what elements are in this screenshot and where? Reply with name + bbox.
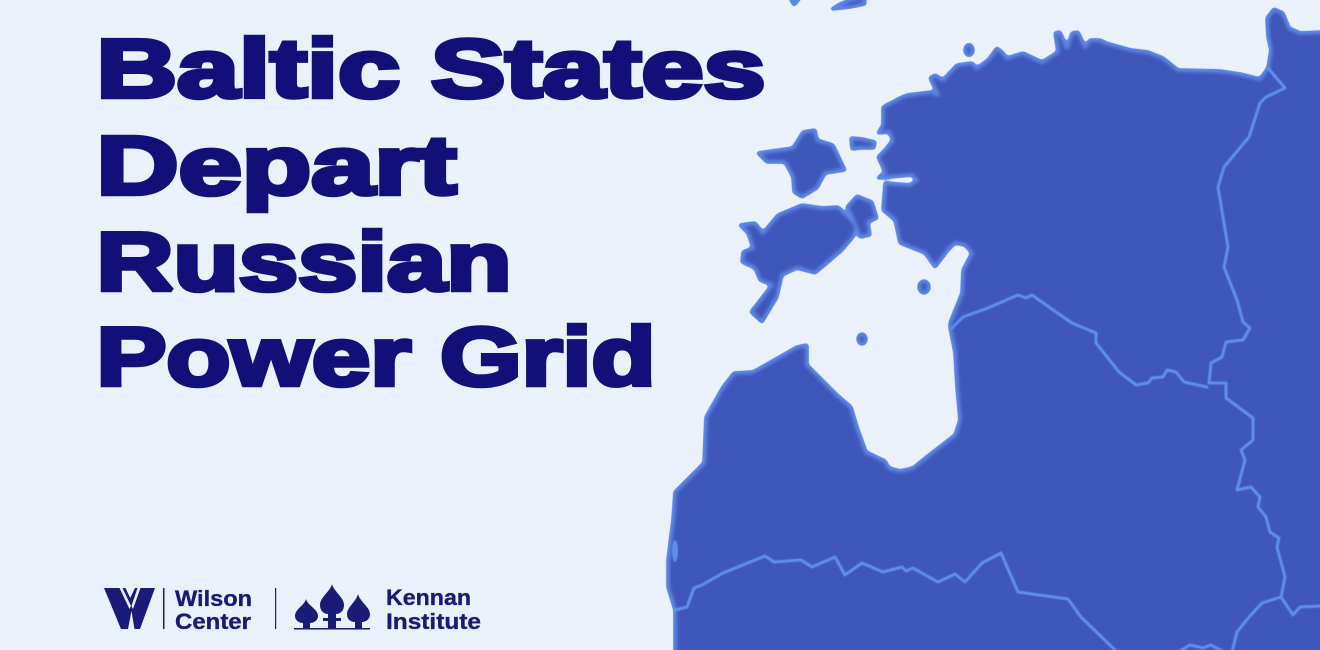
text: Wilson Center (175, 586, 252, 634)
border: southern fragment (1178, 645, 1224, 650)
map: coastal lagoon highlight (672, 540, 678, 562)
title line 4: Power Grid (96, 310, 656, 403)
map: national borders (675, 68, 1320, 650)
text: Kennan Institute: Institute (386, 609, 481, 634)
text: Wilson Center: Wilson (175, 586, 252, 611)
map: mainland Estonia, Latvia and neighbours (668, 9, 1320, 650)
map: land masses (668, 0, 1320, 650)
text: Kennan Institute (386, 585, 481, 634)
map: small island near Hiiumaa (851, 138, 875, 149)
divider: between organisations (275, 588, 276, 629)
border: Latvia–Lithuania (675, 553, 1117, 650)
text: Kennan Institute: Kennan (386, 585, 471, 610)
border: Lithuania–Belarus (1232, 597, 1281, 650)
title line 3: Russian (96, 215, 512, 308)
map: tiny islets (858, 44, 973, 344)
border: Estonia–Latvia (952, 295, 1207, 387)
text: Wilson Center: Center (175, 609, 251, 634)
title line 2: Depart (96, 119, 456, 212)
map: Baltic states (668, 0, 1320, 650)
title line 1: Baltic States (96, 22, 766, 115)
border: Belarus–Russia (1281, 597, 1320, 615)
divider: Wilson mark (163, 588, 164, 629)
border: Estonia–Russia (1209, 68, 1285, 383)
title (96, 22, 766, 403)
map: Hiiumaa island (758, 130, 845, 197)
map: Saaremaa island (740, 205, 857, 322)
logo: Wilson Center and Kennan Institute (104, 584, 481, 634)
map: Muhu island (847, 196, 877, 237)
border: Latvia–Russia (1209, 383, 1285, 597)
icon: Wilson Center W mark (104, 588, 155, 629)
map: northern islets (790, 0, 865, 9)
icon: Kennan Institute onion domes (294, 584, 370, 630)
